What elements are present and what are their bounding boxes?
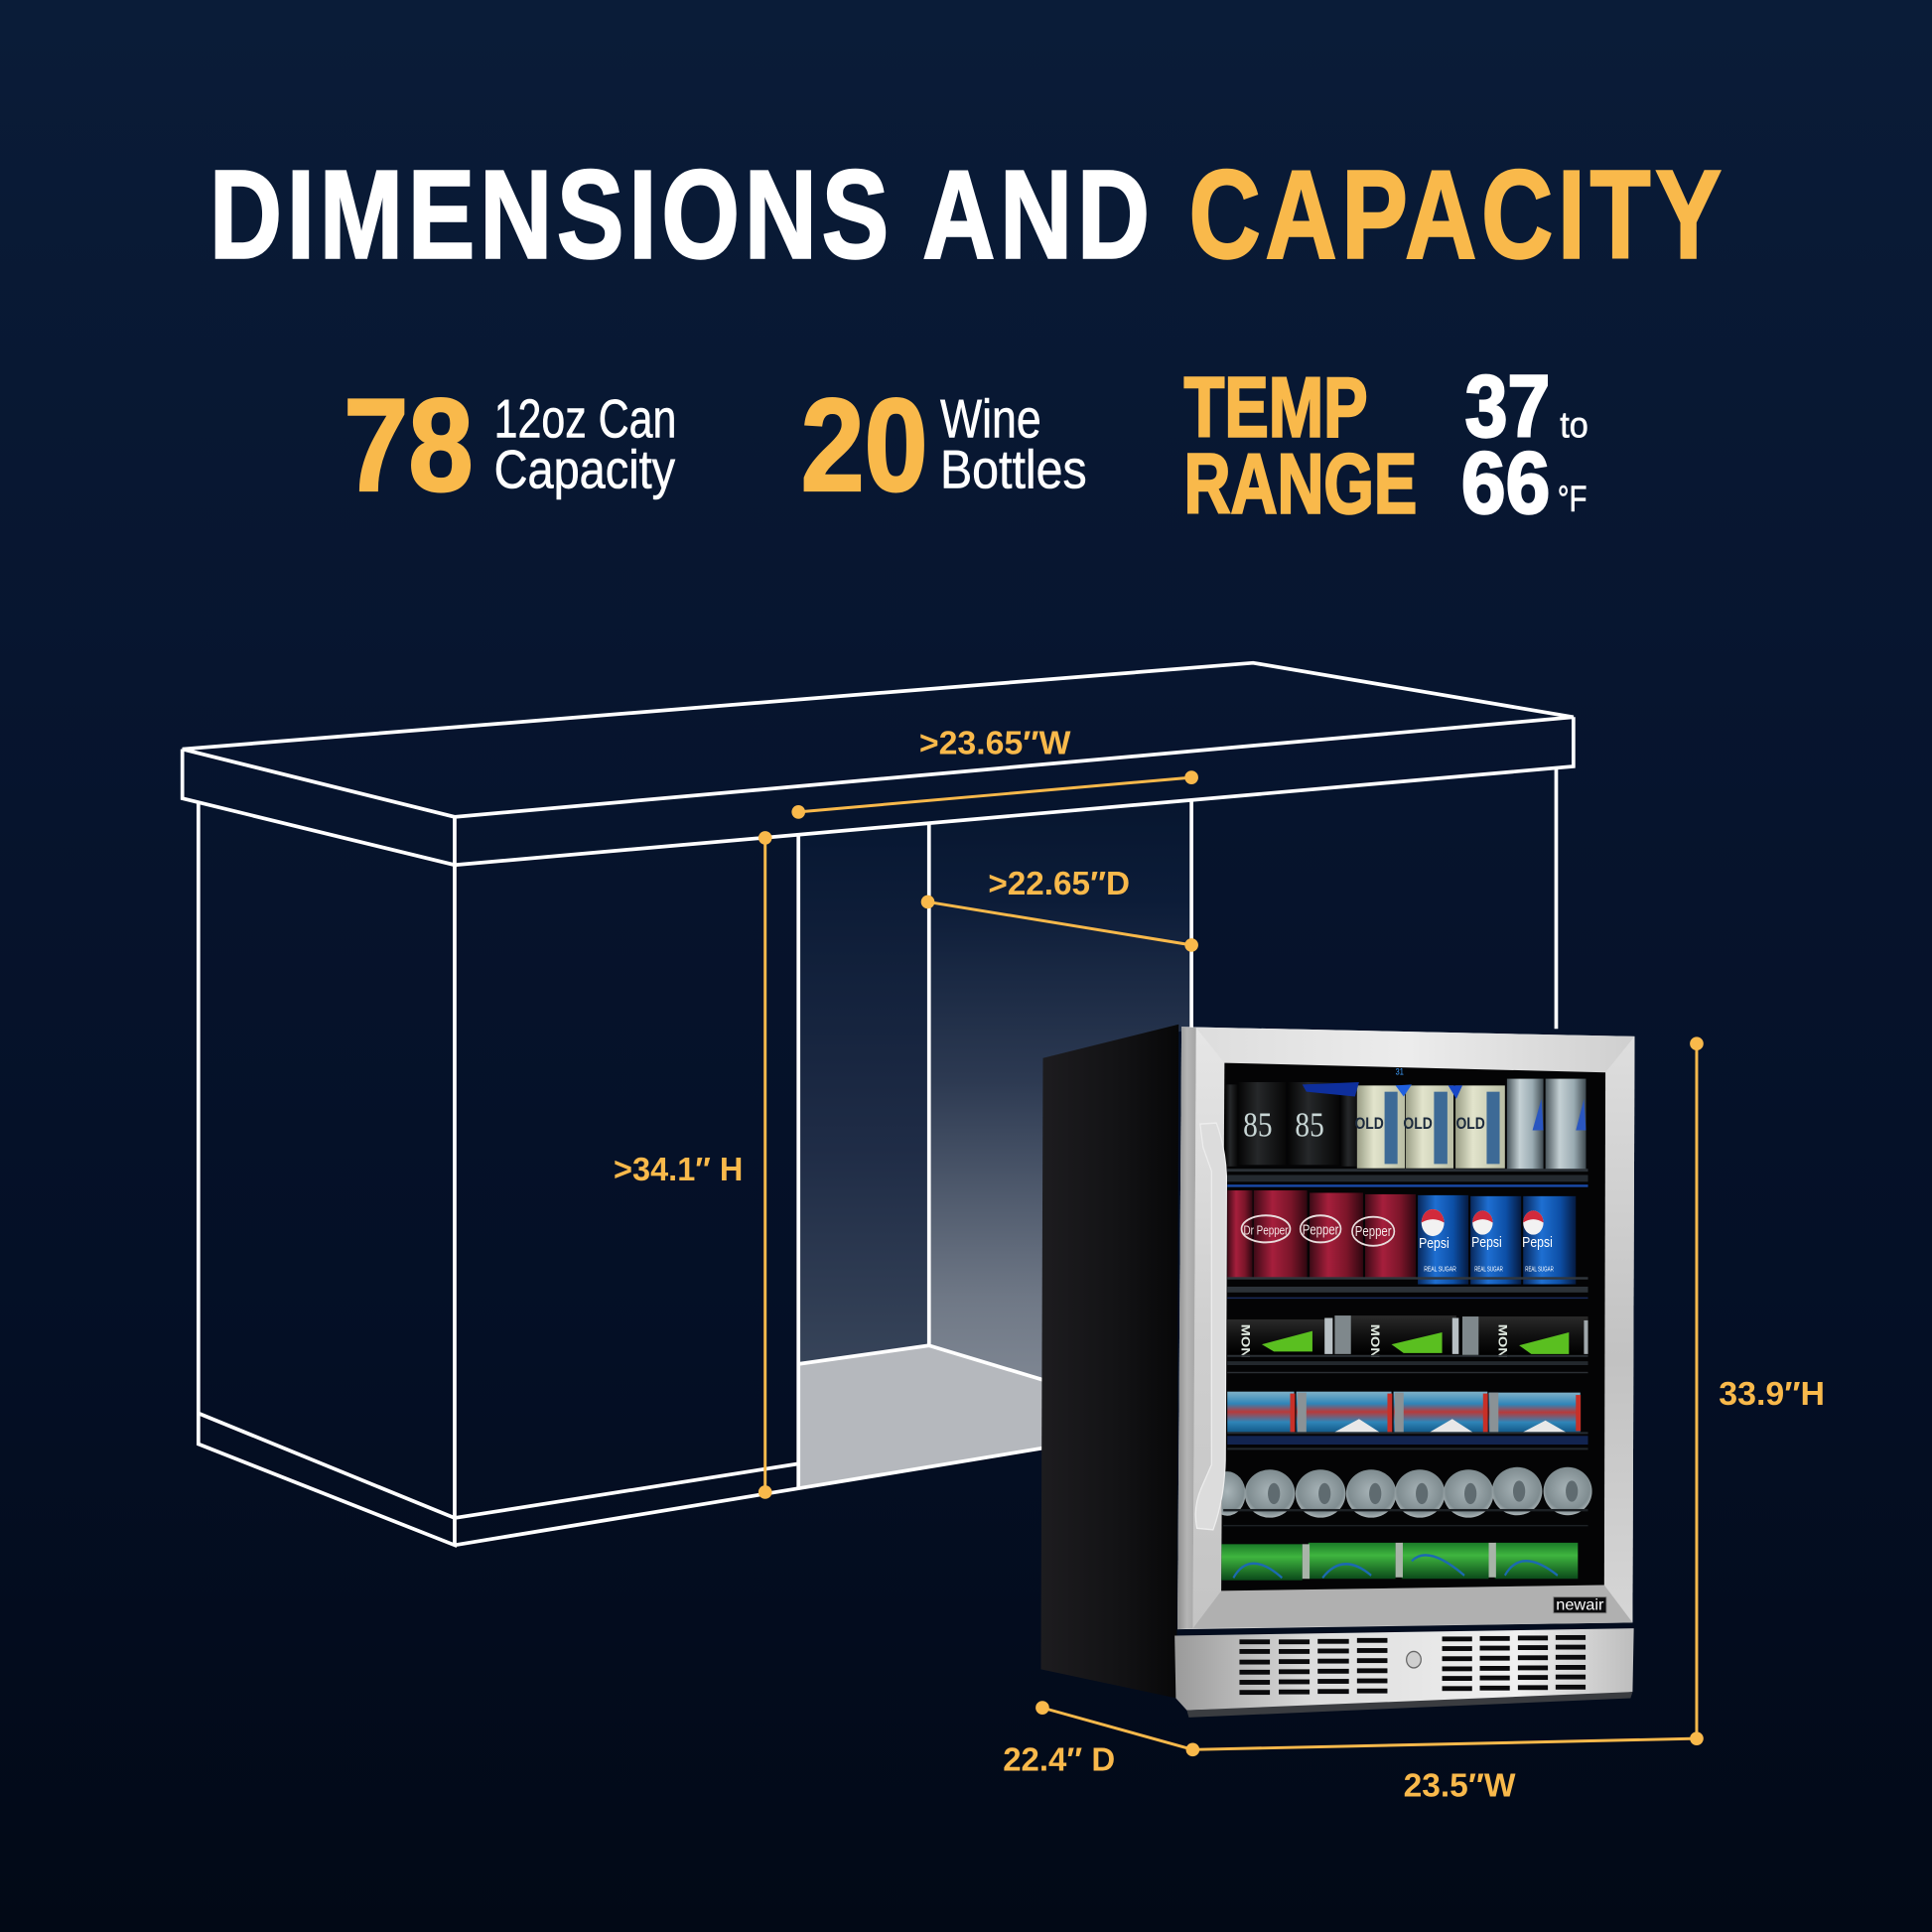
stat: wine bottles: Wine: [940, 389, 1041, 450]
lock: [1407, 1651, 1421, 1668]
fridge dimensions: [1003, 1036, 1825, 1804]
stat: can capacity: 12oz Can: [494, 389, 676, 450]
label: fridge width: 23.5″W: [1404, 1767, 1516, 1804]
cabinet opening: back wall: [929, 801, 1191, 1386]
stat: temperature range: TEMP: [1184, 359, 1368, 455]
fridge side panel: [1040, 1025, 1178, 1698]
fridge glass interior: [1221, 1063, 1605, 1590]
fridge base grille: [1174, 1628, 1634, 1718]
display: 31: [1396, 1067, 1404, 1077]
shelf 1 cans: 85: [1295, 1105, 1324, 1144]
label: opening width: >23.65″W: [919, 726, 1071, 762]
left vents: [1239, 1638, 1387, 1695]
stat: temperature range: to: [1560, 404, 1588, 446]
shelf 2 cans: Dr Pepper: [1244, 1224, 1289, 1238]
arrow: fridge width: [1186, 1738, 1697, 1756]
shelf 1 rack: [1227, 1169, 1588, 1187]
label: fridge height: 33.9″H: [1719, 1376, 1825, 1413]
shelf 2 cans: Pepper: [1303, 1222, 1339, 1238]
shelf 2 cans: Pepsi: [1419, 1235, 1449, 1251]
shelf 3 cans: MON: [1368, 1324, 1382, 1358]
fridge contents: [1209, 1067, 1592, 1581]
stats row: [344, 356, 1588, 531]
title: CAPACITY: [1189, 143, 1726, 284]
shelf 3 cans: [1227, 1315, 1588, 1358]
label: fridge depth: 22.4″ D: [1003, 1741, 1115, 1778]
arrow: opening width: [791, 770, 1198, 819]
shelf 5 rack: [1223, 1509, 1588, 1526]
stat: temperature range: 66: [1461, 433, 1550, 531]
shelf 2 cans: Pepper: [1355, 1223, 1392, 1239]
shelf 2 cans: REAL SUGAR: [1424, 1265, 1456, 1274]
title: DIMENSIONS AND: [209, 143, 1155, 284]
shelf 2 cans: Pepsi: [1471, 1234, 1502, 1250]
cabinet opening: side wall: [798, 824, 929, 1364]
shelf 3 cans: MON: [1239, 1324, 1252, 1358]
stat: can capacity: 78: [344, 372, 474, 519]
shelf 1 cans: OLD: [1403, 1115, 1433, 1133]
arrow: fridge height: [1690, 1036, 1704, 1745]
counter wireframe: [183, 663, 1574, 1545]
stat: can capacity: [344, 372, 676, 519]
arrow: fridge depth: [1035, 1701, 1192, 1749]
shelf 1 cans: OLD: [1354, 1115, 1384, 1133]
brand logo: newair: [1556, 1597, 1604, 1614]
right vents: [1443, 1635, 1586, 1691]
shelf 2 rack: [1227, 1277, 1588, 1299]
shelf 4 cans: [1227, 1392, 1581, 1432]
shelf 2 cans: REAL SUGAR: [1525, 1265, 1554, 1274]
shelf 4 rack: [1227, 1432, 1588, 1449]
stat: temperature range: 37: [1465, 356, 1550, 455]
shelf 1 cans: OLD: [1456, 1115, 1485, 1133]
arrow: opening height: [759, 831, 772, 1499]
fridge handle: [1195, 1123, 1226, 1530]
stat: temperature range: RANGE: [1184, 436, 1417, 531]
shelf 2 cans: [1227, 1190, 1576, 1285]
shelf 1 cans: 85: [1243, 1105, 1273, 1144]
label: opening height: >34.1″ H: [614, 1152, 743, 1188]
stat: wine bottles: [801, 372, 1087, 519]
shelf 2 cans: REAL SUGAR: [1474, 1265, 1503, 1274]
beverage fridge: [1040, 1025, 1634, 1718]
shelf 5 can ends: [1209, 1467, 1592, 1518]
shelf 3 rack: [1227, 1355, 1588, 1373]
stat: can capacity: Capacity: [494, 439, 676, 499]
label: opening depth: >22.65″D: [988, 866, 1130, 902]
shelf 1 cans: [1225, 1079, 1586, 1171]
opening dimensions: [614, 726, 1198, 1499]
stat: wine bottles: Bottles: [940, 439, 1087, 499]
arrow: opening depth: [921, 896, 1198, 952]
shelf 6 cans: [1221, 1543, 1578, 1581]
cabinet opening: floor: [798, 1345, 1059, 1488]
stat: temperature range: °F: [1558, 478, 1587, 519]
fridge door frame: [1177, 1027, 1634, 1629]
stat: temperature range: [1184, 356, 1588, 531]
stat: wine bottles: 20: [801, 372, 928, 519]
shelf 2 cans: Pepsi: [1522, 1234, 1553, 1250]
shelf 3 cans: MON: [1496, 1324, 1510, 1358]
